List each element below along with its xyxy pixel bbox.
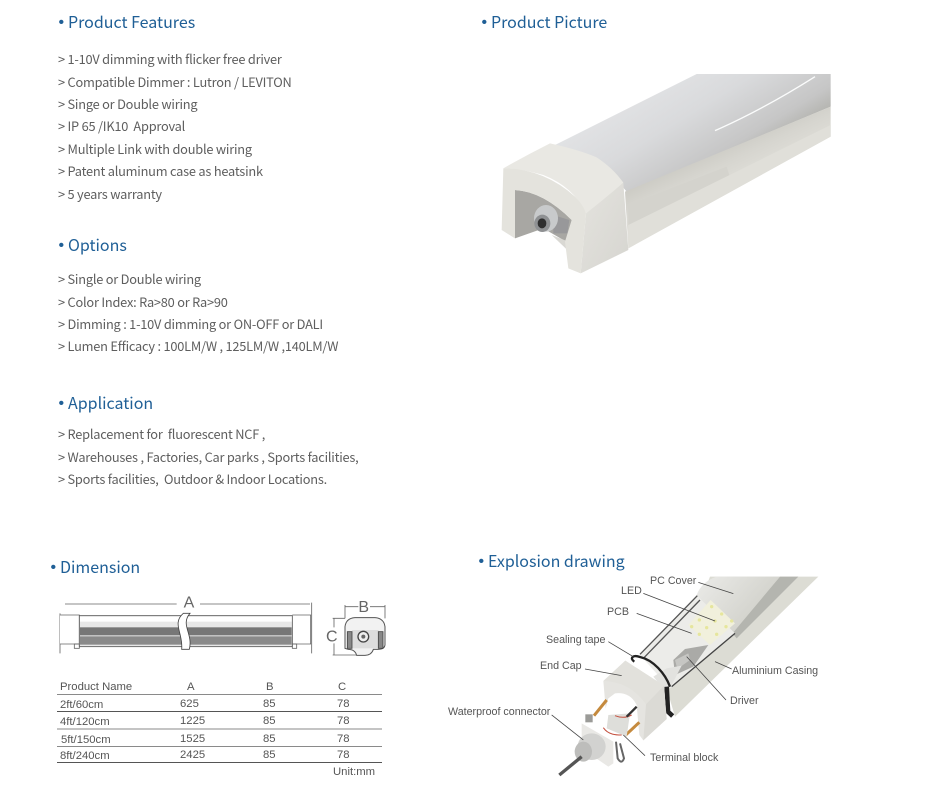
dimension diagram: end view: C xyxy=(326,628,338,645)
unit note: Unit:mm xyxy=(333,766,375,778)
heading: explosion drawing: Explosion drawing xyxy=(488,548,625,572)
list: product features: > Patent aluminum case as heatsink xyxy=(58,161,263,180)
list: application xyxy=(58,424,358,488)
callout labels: LED xyxy=(621,585,642,597)
row: 2ft: 85 xyxy=(263,698,276,710)
dimension diagram: end view: B xyxy=(358,599,369,616)
lens cover xyxy=(555,74,831,192)
cable gland xyxy=(553,215,569,233)
row: 2ft: 78 xyxy=(337,698,350,710)
list: options: > Single or Double wiring xyxy=(58,269,201,288)
waterproof connector xyxy=(559,723,613,775)
cap opening xyxy=(515,190,572,247)
list: application: > Replacement for fluorescent NCF , xyxy=(58,424,265,443)
list: product features: > 1-10V dimming with flicker free driver xyxy=(58,49,282,68)
table rules xyxy=(57,694,382,762)
text: • xyxy=(50,559,56,576)
list: product features xyxy=(58,49,292,203)
table header: C xyxy=(338,681,346,693)
list: options: > Dimming : 1-10V dimming or ON-OFF or DALI xyxy=(58,314,323,333)
row: 4ft: 78 xyxy=(337,715,350,727)
callout labels xyxy=(448,575,818,764)
dimension diagram: side view: A xyxy=(184,595,195,612)
channel xyxy=(640,595,735,688)
row: 5ft: 85 xyxy=(263,733,276,745)
list: product features: > 5 years warranty xyxy=(58,184,162,203)
table header: B xyxy=(266,681,274,693)
dimension diagram: end view xyxy=(326,599,385,655)
end cap xyxy=(603,661,667,740)
terminal block and wires xyxy=(585,700,639,762)
row: 5ft: 5ft/150cm xyxy=(61,734,111,746)
row: 8ft: 8ft/240cm xyxy=(60,750,110,762)
heading: options: Options xyxy=(68,232,127,256)
text: • xyxy=(58,395,64,412)
list: application: > Warehouses , Factories, Car parks , Sports facilities, xyxy=(58,447,358,466)
table header: A xyxy=(187,681,195,693)
text: • xyxy=(58,237,64,254)
callout labels: End Cap xyxy=(540,660,582,672)
callout labels: Sealing tape xyxy=(546,634,605,646)
driver xyxy=(673,645,708,675)
callout labels: Waterproof connector xyxy=(448,706,551,718)
highlight xyxy=(715,77,815,131)
callout labels: PC Cover xyxy=(650,575,697,587)
text: • xyxy=(478,553,484,570)
row: 5ft xyxy=(61,733,350,746)
callout leaders xyxy=(552,582,733,756)
row: 2ft xyxy=(60,698,350,711)
heading: product features: Product Features xyxy=(68,9,195,33)
dimension table xyxy=(57,681,382,778)
end cap top xyxy=(503,143,623,213)
callout labels: Aluminium Casing xyxy=(732,665,818,677)
callout labels: PCB xyxy=(607,606,629,618)
list: product features: > Singe or Double wiring xyxy=(58,94,197,113)
list: options: > Color Index: Ra>80 or Ra>90 xyxy=(58,292,228,311)
row: 4ft: 1225 xyxy=(180,715,205,727)
picture: LED tri-proof light xyxy=(502,74,831,273)
dimension diagram: side view xyxy=(60,595,312,653)
text: • xyxy=(58,14,64,31)
PCB with LEDs xyxy=(688,600,735,645)
list: product features: > Compatible Dimmer : Lutron / LEVITON xyxy=(58,72,292,91)
sealing tape xyxy=(632,656,670,687)
text: • xyxy=(482,14,487,31)
heading: product picture: Product Picture xyxy=(491,9,607,33)
list: options: > Lumen Efficacy : 100LM/W , 125LM/W ,140LM/W xyxy=(58,336,338,355)
aluminium body xyxy=(625,107,831,248)
row: 5ft: 78 xyxy=(337,733,350,745)
row: 8ft xyxy=(60,749,350,762)
table header: Product Name xyxy=(60,681,132,693)
list: product features: > Multiple Link with double wiring xyxy=(58,139,252,158)
row: 4ft: 85 xyxy=(263,715,276,727)
list: product features: > IP 65 /IK10 Approval xyxy=(58,116,185,135)
row: 4ft: 4ft/120cm xyxy=(60,716,110,728)
row: 5ft: 1525 xyxy=(180,733,205,745)
row: 2ft: 2ft/60cm xyxy=(60,699,103,711)
callout labels: Terminal block xyxy=(650,752,719,764)
PC cover xyxy=(697,577,780,632)
aluminium casing xyxy=(667,577,818,717)
heading: application: Application xyxy=(68,390,153,414)
row: 8ft: 78 xyxy=(337,749,350,761)
end cap front xyxy=(502,168,586,273)
list: application: > Sports facilities, Outdoor & Indoor Locations. xyxy=(58,469,327,488)
end cap side xyxy=(581,183,628,273)
list: options xyxy=(58,269,338,355)
row: 2ft: 625 xyxy=(180,698,199,710)
heading: dimension: Dimension xyxy=(60,554,140,578)
table header xyxy=(60,681,346,693)
callout labels: Driver xyxy=(730,695,759,707)
row: 8ft: 85 xyxy=(263,749,276,761)
row: 8ft: 2425 xyxy=(180,749,205,761)
explosion drawing xyxy=(448,575,818,775)
row: 4ft xyxy=(60,715,350,728)
